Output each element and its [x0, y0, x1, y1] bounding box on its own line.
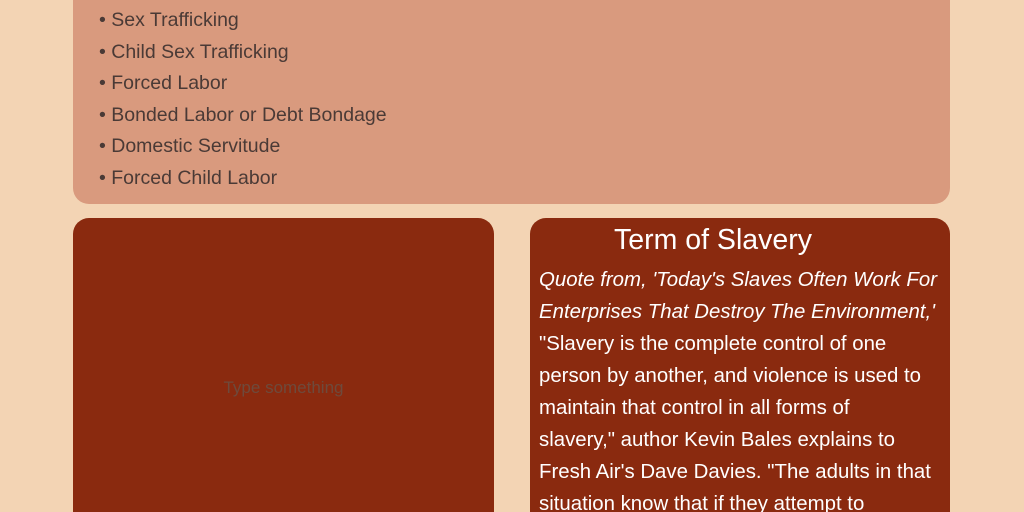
- bullet list: [99, 9, 387, 189]
- quote text: "Slavery is the complete control of one: [539, 333, 886, 355]
- placeholder text: Type something: [223, 378, 344, 397]
- bullet list: • Child Sex Trafficking: [99, 41, 289, 63]
- quote text: Enterprises That Destroy The Environment,': [539, 301, 935, 323]
- panel: term of slavery: [530, 218, 950, 512]
- quote text: Fresh Air's Dave Davies. "The adults in that: [539, 461, 931, 483]
- bullet list: • Domestic Servitude: [99, 135, 280, 157]
- heading: Term of Slavery: [614, 224, 812, 256]
- quote text: slavery," author Kevin Bales explains to: [539, 429, 895, 451]
- quote text: maintain that control in all forms of: [539, 397, 850, 419]
- panel: left placeholder: [73, 218, 494, 512]
- bullet list: • Bonded Labor or Debt Bondage: [99, 104, 387, 126]
- bullet list: • Forced Child Labor: [99, 167, 277, 189]
- bullet list: • Forced Labor: [99, 72, 227, 94]
- quote text: person by another, and violence is used to: [539, 365, 921, 387]
- quote text: Quote from, 'Today's Slaves Often Work For: [539, 269, 937, 291]
- bullet list: • Sex Trafficking: [99, 9, 239, 31]
- panel: types list: [73, 0, 950, 204]
- quote text: [539, 269, 938, 512]
